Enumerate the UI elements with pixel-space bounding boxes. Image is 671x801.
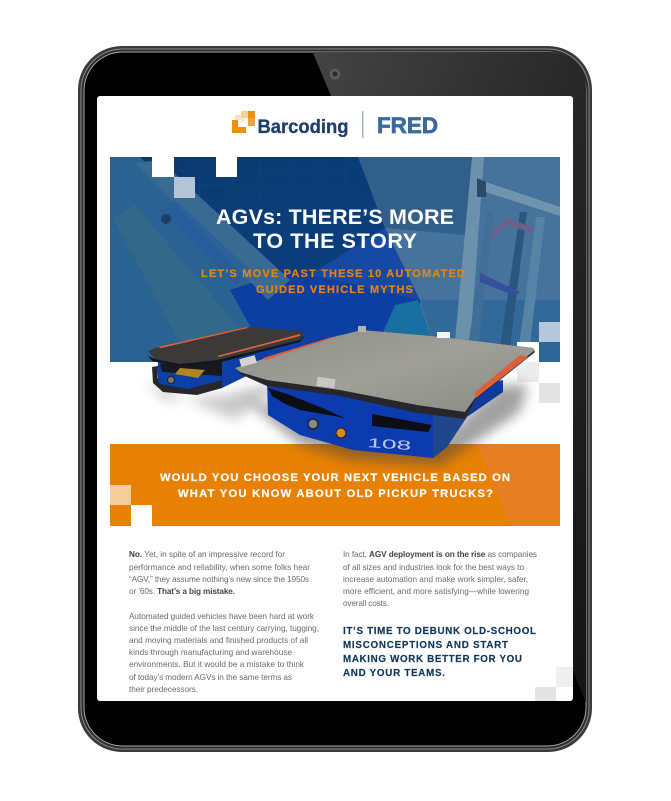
paragraph 1 (129, 550, 310, 596)
large AGV robot (235, 326, 535, 458)
tablet frame (78, 46, 592, 752)
paragraph 1: No. Yet, in spite of an impressive record for (129, 550, 285, 559)
hero title: AGVs: THERE’S MORE (216, 205, 454, 229)
logo divider (362, 111, 364, 138)
banner text: WOULD YOU CHOOSE YOUR NEXT VEHICLE BASED ON (160, 472, 510, 484)
call to action heading (343, 626, 536, 679)
hero subtitle: GUIDED VEHICLE MYTHS (256, 284, 413, 296)
orange banner (110, 444, 560, 526)
paragraph 3: of all sizes and industries look for the best ways to (343, 563, 524, 572)
AGV shadows (145, 375, 528, 466)
tablet screen (97, 96, 577, 701)
call to action heading: IT’S TIME TO DEBUNK OLD-SCHOOL (343, 626, 536, 637)
grey decorative squares (517, 362, 560, 403)
paragraph 2: environments. But it would be a mistake to think (129, 660, 305, 669)
Barcoding wordmark: Barcoding (258, 117, 348, 138)
robot deck plate (235, 326, 535, 419)
paragraph 2: of today’s modern AGVs in the same terms as (129, 673, 292, 682)
hero subtitle: LET’S MOVE PAST THESE 10 AUTOMATED (201, 268, 465, 280)
header logos (232, 111, 438, 138)
aluminium frame bars (455, 157, 484, 340)
paragraph 1: performance and reliability, when some folks hear (129, 563, 310, 572)
banner text (160, 472, 510, 500)
call to action heading: AND YOUR TEAMS. (343, 668, 445, 679)
small AGV robot (148, 327, 305, 395)
hero panel (110, 157, 560, 362)
paragraph 2: since the middle of the last century carrying, tugging, (129, 624, 319, 633)
Barcoding logo icon (232, 111, 255, 133)
hero subtitle (201, 268, 465, 296)
paragraph 2: and moving materials and finished products of all (129, 636, 308, 645)
paragraph 3: increase automation and make work simpler, safer, (343, 575, 528, 584)
decorative squares (152, 157, 560, 362)
body column left (129, 550, 319, 694)
paragraph 3: more efficient, and more satisfying—while lowering (343, 587, 529, 596)
paragraph 1: “AGV,” they assume nothing’s new since the 1950s (129, 575, 309, 584)
banner squares (110, 485, 152, 526)
paragraph 3: In fact, AGV deployment is on the rise as companies (343, 550, 537, 559)
banner text: WHAT YOU KNOW ABOUT OLD PICKUP TRUCKS? (178, 488, 493, 500)
call to action heading: MAKING WORK BETTER FOR YOU (343, 654, 522, 665)
paragraph 2: Automated guided vehicles have been hard at work (129, 612, 315, 621)
call to action heading: MISCONCEPTIONS AND START (343, 640, 508, 651)
paragraph 3 (343, 550, 537, 608)
warehouse racks background (140, 157, 385, 274)
robot blue body: 108 (367, 435, 412, 453)
bezel reflection (313, 50, 590, 712)
camera (330, 68, 340, 80)
paragraph 2 (129, 612, 319, 694)
hero title: TO THE STORY (253, 229, 417, 253)
FRED logo: FRED (377, 113, 438, 138)
paragraph 1: or ’60s. That’s a big mistake. (129, 587, 235, 596)
corner squares (535, 667, 577, 701)
paragraph 2: kinds through manufacturing and warehouse (129, 648, 292, 657)
hero title (216, 205, 454, 253)
paragraph 3: overall costs. (343, 599, 389, 608)
tablet infographic (78, 46, 592, 752)
paragraph 2: their predecessors. (129, 685, 198, 694)
robot blue body (267, 380, 503, 458)
body column right (343, 550, 537, 679)
